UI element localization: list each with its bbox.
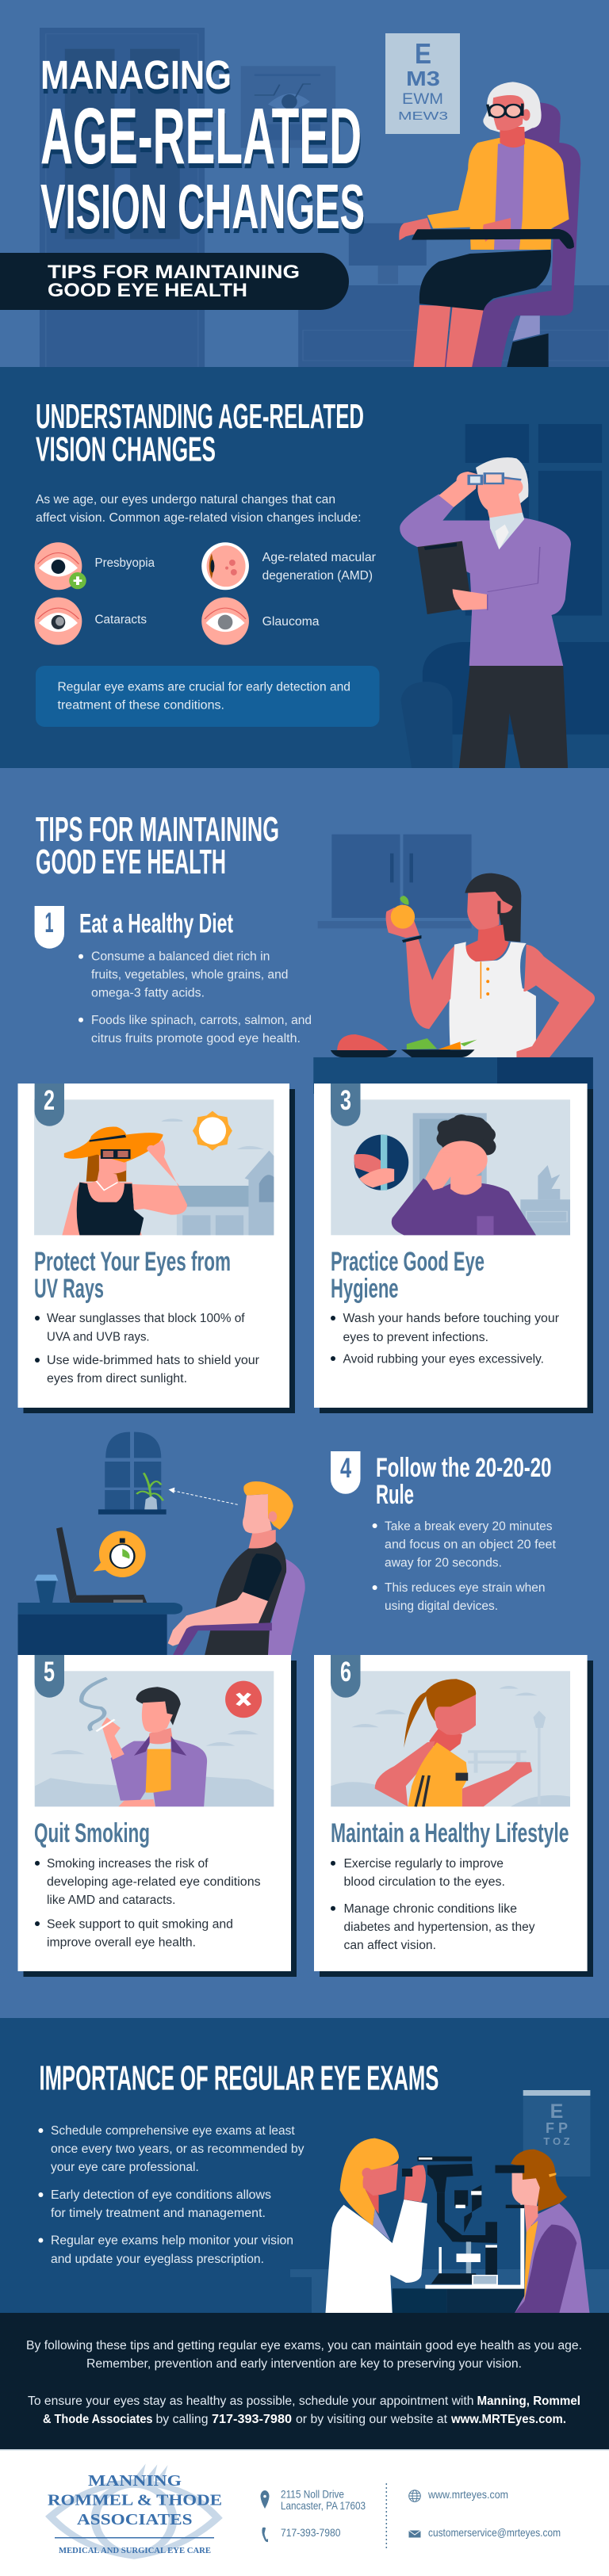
logo: ASSOCIATES: [77, 2511, 192, 2528]
badge 5: [35, 1655, 64, 1698]
illustration: woman eating healthy food: [313, 835, 595, 1094]
label: glaucoma: Glaucoma: [262, 615, 320, 629]
badge 6: [331, 1655, 360, 1698]
bullets: eyes to prevent infections.: [343, 1331, 488, 1344]
bullets: blood circulation to the eyes.: [344, 1875, 505, 1889]
section heading: TIPS FOR MAINTAINING: [36, 810, 279, 849]
heading: Eat a Healthy Diet: [79, 909, 233, 939]
label: AMD: Age-related macular: [262, 551, 376, 564]
icon: glaucoma eye: [201, 598, 249, 645]
illustration: man at desk looking out window: [18, 1432, 305, 1655]
bullets: developing age-related eye conditions: [47, 1875, 261, 1889]
bullets: Avoid rubbing your eyes excessively.: [343, 1352, 544, 1366]
panel: understanding age-related vision changes: [0, 367, 609, 768]
illustration background: eye chart and bench: E: [550, 2100, 563, 2123]
call to action: www.MRTEyes.com.: [450, 2413, 566, 2426]
bullets: UVA and UVB rays.: [47, 1331, 150, 1344]
bullets: like AMD and cataracts.: [47, 1894, 175, 1907]
badge 4: [331, 1451, 360, 1494]
bullets: [79, 950, 312, 1045]
card 3: practice good eye hygiene: [314, 1084, 593, 1413]
bullets: Wash your hands before touching your: [343, 1312, 559, 1325]
address: Lancaster, PA 17603: [281, 2499, 366, 2512]
intro text: As we age, our eyes undergo natural changes that can: [36, 493, 335, 506]
call to action: or by visiting our website at: [296, 2413, 448, 2426]
hero title: [40, 52, 365, 242]
bullets: your eye care professional.: [51, 2161, 199, 2174]
bullets: fruits, vegetables, whole grains, and: [91, 969, 288, 982]
bullets: omega-3 fatty acids.: [91, 987, 205, 1000]
callout: regular eye exams: [36, 666, 379, 727]
badge 1: [35, 906, 64, 949]
address: 2115 Noll Drive: [281, 2488, 344, 2501]
bullets: for timely treatment and management.: [51, 2207, 266, 2220]
icon: phone: [262, 2528, 268, 2542]
bullets: [373, 1520, 557, 1613]
panel: hero: [0, 0, 609, 367]
section heading: VISION CHANGES: [36, 430, 216, 469]
illustration: woman running: [331, 1671, 570, 1806]
label: presbyopia: Presbyopia: [95, 556, 155, 570]
heading: Rule: [376, 1480, 414, 1510]
icon: globe: [409, 2490, 420, 2501]
bullets: This reduces eye strain when: [385, 1581, 546, 1595]
intro text: [36, 493, 361, 525]
section heading: UNDERSTANDING AGE-RELATED: [36, 397, 364, 436]
illustration: man smoking: [35, 1671, 274, 1806]
intro text: affect vision. Common age-related vision changes include:: [36, 511, 361, 525]
heading: [376, 1453, 552, 1510]
heading: UV Rays: [34, 1274, 104, 1304]
label: AMD: [262, 551, 376, 583]
illustration: person rubbing eye: [331, 1099, 570, 1235]
logo: MANNING: [88, 2472, 182, 2490]
closing paragraph: [26, 2339, 582, 2371]
bullets: Consume a balanced diet rich in: [91, 950, 270, 964]
section heading: GOOD EYE HEALTH: [36, 843, 226, 881]
badge 6: 6: [340, 1657, 351, 1687]
call to action: [28, 2394, 580, 2426]
section heading: [36, 810, 279, 881]
panel: footer: [0, 2449, 609, 2576]
bullets: can affect vision.: [344, 1939, 436, 1952]
badge 3: [331, 1084, 360, 1126]
badge 4: 4: [340, 1453, 351, 1484]
hero title: VISION CHANGES: [40, 171, 365, 242]
logo: [48, 2463, 222, 2556]
badge 2: [35, 1084, 64, 1126]
hero background: clinic room: [40, 28, 609, 367]
bullets: and update your eyeglass prescription.: [51, 2253, 264, 2266]
illustration: doctor examining patient with slit lamp: [325, 2138, 590, 2313]
bullets: and focus on an object 20 feet: [385, 1538, 557, 1552]
tip 4: follow the 20-20-20 rule: [18, 1432, 557, 1655]
bullets: improve overall eye health.: [47, 1936, 196, 1950]
bullets: [35, 1312, 259, 1385]
eye chart: E: [415, 37, 431, 70]
phone number: 717-393-7980: [281, 2526, 341, 2539]
bullets: diabetes and hypertension, as they: [344, 1921, 535, 1934]
background: window and sofa: [400, 424, 609, 768]
bullets: [35, 1857, 261, 1950]
bullets: Take a break every 20 minutes: [385, 1520, 553, 1534]
card 5: quit smoking: [17, 1655, 297, 1977]
panel: tips for maintaining good eye health: [0, 768, 609, 2018]
bullets: [331, 1312, 559, 1366]
heading: Hygiene: [331, 1274, 398, 1304]
tip 1: eat a healthy diet: [35, 835, 595, 1094]
call to action: 717-393-7980: [212, 2413, 292, 2426]
illustration background: eye chart and bench: T O Z: [543, 2135, 570, 2147]
panel: closing message: [0, 2313, 609, 2450]
hero title: MANAGING: [40, 52, 232, 97]
website: www.mrteyes.com: [427, 2488, 508, 2501]
heading: Quit Smoking: [34, 1818, 150, 1848]
bullets: Seek support to quit smoking and: [47, 1918, 233, 1932]
icon: AMD retina: [201, 542, 249, 590]
hero subtitle pill: TIPS FOR MAINTAINING: [48, 262, 300, 283]
bullets: Smoking increases the risk of: [47, 1857, 209, 1871]
card 6: maintain a healthy lifestyle: [314, 1655, 593, 1977]
heading: Practice Good Eye: [331, 1247, 485, 1277]
eye chart: EWM: [402, 91, 443, 108]
bullets: Wear sunglasses that block 100% of: [47, 1312, 245, 1325]
hero title: AGE-RELATED: [40, 92, 362, 181]
heading: [34, 1247, 231, 1304]
call to action: & Thode Associates: [43, 2413, 152, 2426]
bullets: Use wide-brimmed hats to shield your: [47, 1354, 259, 1367]
bullets: Schedule comprehensive eye exams at least: [51, 2124, 295, 2138]
heading: Protect Your Eyes from: [34, 1247, 231, 1277]
card 2: protect your eyes from UV rays: [17, 1084, 295, 1413]
illustration background: eye chart and bench: [290, 2090, 609, 2313]
illustration: man with glasses and tablet: [400, 457, 571, 768]
badge 5: 5: [44, 1657, 55, 1687]
badge 1: 1: [44, 908, 54, 938]
badge 2: 2: [44, 1085, 55, 1116]
address: [281, 2488, 366, 2512]
illustration: woman in sun hat: [34, 1099, 274, 1235]
eye chart: M3: [406, 67, 440, 90]
bullets: [331, 1857, 535, 1952]
bullets: Regular eye exams help monitor your vision: [51, 2234, 293, 2248]
email: customerservice@mrteyes.com: [428, 2526, 561, 2539]
logo: MEDICAL AND SURGICAL EYE CARE: [59, 2546, 211, 2555]
icon: envelope: [409, 2530, 420, 2538]
bullets: Foods like spinach, carrots, salmon, and: [91, 1014, 312, 1027]
closing paragraph: Remember, prevention and early intervention are key to preserving your vision.: [86, 2357, 522, 2371]
panel: importance of regular eye exams: [0, 2018, 609, 2313]
hero subtitle pill: [0, 253, 349, 310]
bullets: eyes from direct sunlight.: [47, 1372, 187, 1385]
logo: ROMMEL & THODE: [48, 2492, 222, 2509]
icon: cataracts eye: [35, 598, 82, 645]
badge 3: 3: [340, 1085, 351, 1116]
bullets: [38, 2124, 304, 2266]
section heading: [36, 397, 364, 469]
hero subtitle pill: GOOD EYE HEALTH: [48, 280, 247, 301]
call to action: Manning, Rommel: [477, 2394, 580, 2408]
callout: regular eye exams: treatment of these conditions.: [57, 699, 224, 713]
bullets: Manage chronic conditions like: [344, 1902, 517, 1916]
call to action: To ensure your eyes stay as healthy as possible, schedule your appointment with: [28, 2394, 474, 2408]
closing paragraph: By following these tips and getting regular eye exams, you can maintain good eye health as you age.: [26, 2339, 582, 2352]
bullets: using digital devices.: [385, 1599, 498, 1613]
icon: presbyopia eye: [35, 542, 86, 590]
eye chart: MEW3: [398, 109, 448, 123]
illustration background: eye chart and bench: F P: [546, 2120, 568, 2136]
bullets: away for 20 seconds.: [385, 1557, 502, 1570]
callout: regular eye exams: Regular eye exams are crucial for early detection and: [57, 681, 350, 694]
illustration: woman in exam chair: [399, 82, 580, 367]
eye chart: [385, 33, 460, 134]
label: cataracts: Cataracts: [95, 613, 147, 627]
label: AMD: degeneration (AMD): [262, 569, 373, 583]
heading: [331, 1247, 485, 1304]
call to action: by calling: [155, 2413, 208, 2426]
bullets: Exercise regularly to improve: [344, 1857, 504, 1871]
icon: location pin: [260, 2490, 270, 2509]
bullets: Early detection of eye conditions allows: [51, 2188, 271, 2202]
bullets: citrus fruits promote good eye health.: [91, 1032, 301, 1045]
bullets: once every two years, or as recommended by: [51, 2142, 304, 2156]
